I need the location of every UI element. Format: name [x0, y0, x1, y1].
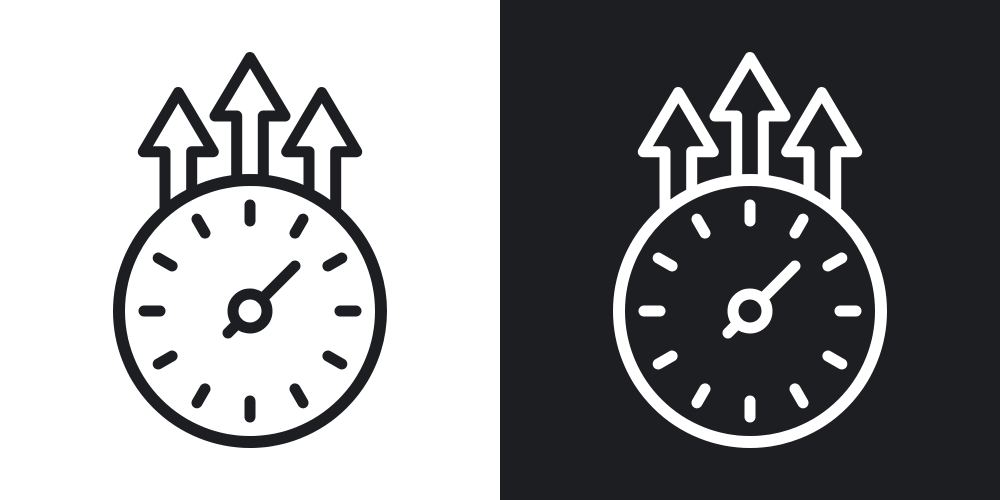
icon: white speedometer on dark panel — [619, 58, 881, 442]
panel: light background — [0, 0, 500, 500]
gauge dial ring — [619, 180, 881, 442]
gauge tick marks — [144, 205, 356, 417]
gauge needle — [228, 266, 295, 333]
arrow: centre — [715, 58, 785, 180]
arrow: right — [787, 92, 857, 207]
arrow: left — [143, 92, 213, 207]
gauge hub — [733, 294, 767, 328]
gauge needle — [728, 266, 795, 333]
gauge dial ring — [119, 180, 381, 442]
panel: dark background — [500, 0, 1000, 500]
gauge hub — [233, 294, 267, 328]
gauge tick marks — [644, 205, 856, 417]
arrow: right — [287, 92, 357, 207]
arrow: left — [643, 92, 713, 207]
icon: dark speedometer on light panel — [119, 58, 381, 442]
arrow: centre — [215, 58, 285, 180]
